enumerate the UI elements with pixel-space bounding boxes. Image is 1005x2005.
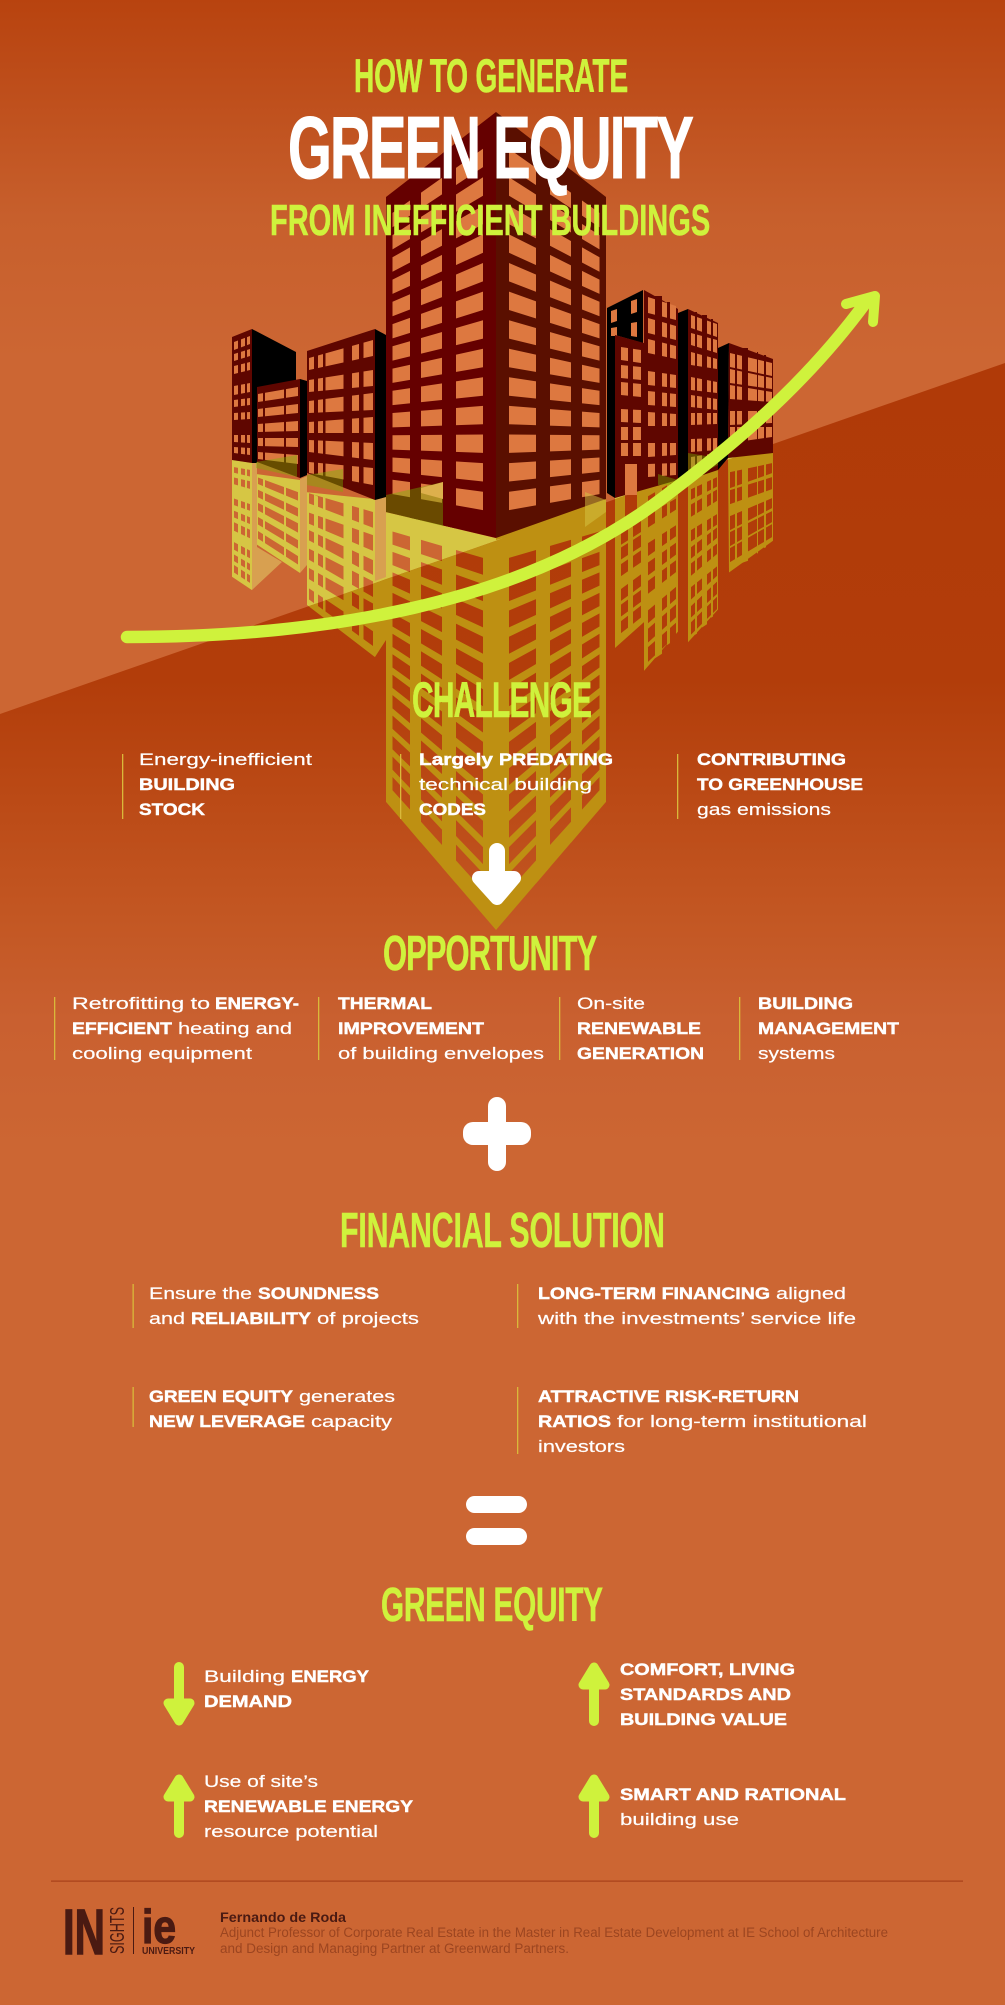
author name: Fernando de Roda bbox=[220, 1909, 346, 1925]
item: renewable generation: RENEWABLE bbox=[577, 1019, 701, 1038]
item: thermal improvement: of building envelopes bbox=[338, 1044, 544, 1063]
author bio: and Design and Managing Partner at Greenward Partners. bbox=[220, 1941, 569, 1956]
item: soundness and reliability: SOUNDNESS bbox=[258, 1284, 379, 1303]
item: comfort and building value bbox=[583, 1660, 795, 1729]
item: attractive risk-return: investors bbox=[538, 1437, 625, 1456]
item: attractive risk-return: for long-term institutional bbox=[617, 1412, 867, 1431]
item: green equity leverage: GREEN EQUITY bbox=[149, 1387, 294, 1406]
icon: up arrow bbox=[583, 1667, 605, 1721]
item: predating codes: CODES bbox=[419, 800, 486, 819]
panel: opportunity bbox=[54, 926, 900, 1063]
item: retrofitting: ENERGY- bbox=[215, 994, 299, 1013]
item: thermal improvement: THERMAL bbox=[338, 994, 432, 1013]
item: renewable energy potential: resource potential bbox=[204, 1822, 378, 1841]
heading: challenge: CHALLENGE bbox=[412, 672, 592, 728]
item: predating codes: Largely bbox=[419, 750, 494, 769]
panel: green equity bbox=[168, 1579, 846, 1841]
item: green equity leverage bbox=[132, 1387, 395, 1431]
heading: opportunity: OPPORTUNITY bbox=[383, 926, 597, 981]
item: long-term financing bbox=[517, 1284, 856, 1328]
item: green equity leverage: capacity bbox=[311, 1412, 393, 1431]
item: renewable generation bbox=[559, 994, 704, 1063]
heading: green equity: GREEN EQUITY bbox=[381, 1579, 603, 1632]
item: building management: MANAGEMENT bbox=[758, 1019, 900, 1038]
item: predating codes bbox=[400, 750, 613, 819]
item: attractive risk-return bbox=[517, 1387, 867, 1456]
title line 2: GREEN EQUITY bbox=[288, 98, 694, 197]
item: retrofitting: cooling equipment bbox=[72, 1044, 252, 1063]
item: long-term financing: with the investments’ service life bbox=[537, 1309, 856, 1328]
item: predating codes: technical building bbox=[419, 775, 592, 794]
item: greenhouse gas emissions: gas emissions bbox=[697, 800, 831, 819]
item: soundness and reliability: and bbox=[149, 1309, 185, 1328]
item: retrofitting bbox=[54, 994, 299, 1063]
growth arrow bbox=[127, 296, 875, 637]
logo: IN Sights, IE University: SIGHTS bbox=[107, 1907, 129, 1954]
item: building management bbox=[739, 994, 900, 1063]
footer bbox=[63, 1896, 888, 1968]
item: soundness and reliability: Ensure the bbox=[149, 1284, 252, 1303]
item: greenhouse gas emissions: CONTRIBUTING bbox=[697, 750, 846, 769]
panel: financial solution bbox=[132, 1203, 867, 1456]
item: soundness and reliability: of projects bbox=[317, 1309, 419, 1328]
item: renewable energy potential bbox=[168, 1772, 414, 1841]
item: predating codes: PREDATING bbox=[499, 750, 613, 769]
item: thermal improvement: IMPROVEMENT bbox=[338, 1019, 485, 1038]
item: smart and rational use bbox=[583, 1779, 846, 1833]
item: green equity leverage: NEW LEVERAGE bbox=[149, 1412, 305, 1431]
icon: down arrow bbox=[168, 1667, 190, 1721]
illustration: reflection of buildings bbox=[232, 453, 773, 930]
item: long-term financing: aligned bbox=[776, 1284, 846, 1303]
author bio: Adjunct Professor of Corporate Real Estate in the Master in Real Estate Development at IE School of Architecture bbox=[220, 1925, 888, 1940]
item: renewable generation: GENERATION bbox=[577, 1044, 704, 1063]
logo: IN Sights, IE University: ie bbox=[142, 1900, 176, 1953]
item: energy-inefficient building stock: BUILDING bbox=[139, 775, 235, 794]
item: greenhouse gas emissions bbox=[677, 750, 863, 819]
item: energy-inefficient building stock bbox=[122, 750, 312, 819]
icon: up arrow bbox=[583, 1779, 605, 1833]
item: attractive risk-return: ATTRACTIVE RISK-RETURN bbox=[538, 1387, 799, 1406]
item: soundness and reliability: RELIABILITY bbox=[191, 1309, 312, 1328]
title line 1: HOW TO GENERATE bbox=[354, 51, 628, 103]
title bbox=[270, 51, 710, 244]
logo: IN Sights, IE University: UNIVERSITY bbox=[142, 1946, 195, 1957]
icon: equals bbox=[466, 1496, 527, 1545]
item: energy demand: DEMAND bbox=[204, 1692, 292, 1711]
heading: financial solution: FINANCIAL SOLUTION bbox=[340, 1203, 665, 1258]
item: building management: systems bbox=[758, 1044, 835, 1063]
logo: IN Sights, IE University bbox=[63, 1896, 195, 1968]
item: smart and rational use: building use bbox=[620, 1810, 739, 1829]
item: energy demand: Building bbox=[204, 1667, 285, 1686]
panel: challenge bbox=[122, 672, 863, 819]
illustration: buildings bbox=[232, 112, 773, 590]
item: building management: BUILDING bbox=[758, 994, 853, 1013]
item: comfort and building value: BUILDING VALUE bbox=[620, 1710, 787, 1729]
item: retrofitting: EFFICIENT bbox=[72, 1019, 173, 1038]
item: renewable energy potential: Use of site’s bbox=[204, 1772, 318, 1791]
title line 3: FROM INEFFICIENT BUILDINGS bbox=[270, 195, 710, 244]
item: retrofitting: Retrofitting to bbox=[72, 994, 210, 1013]
item: renewable energy potential: RENEWABLE ENERGY bbox=[204, 1797, 414, 1816]
item: retrofitting: heating and bbox=[178, 1019, 292, 1038]
item: renewable generation: On-site bbox=[577, 994, 645, 1013]
item: comfort and building value: COMFORT, LIVING bbox=[620, 1660, 795, 1679]
author bio bbox=[220, 1925, 888, 1956]
icon: white down arrow bbox=[479, 851, 514, 898]
logo: IN Sights, IE University: IN bbox=[63, 1896, 105, 1968]
icon: up arrow bbox=[168, 1779, 190, 1833]
item: comfort and building value: STANDARDS AND bbox=[620, 1685, 791, 1704]
item: long-term financing: LONG-TERM FINANCING bbox=[538, 1284, 770, 1303]
item: energy demand bbox=[168, 1667, 370, 1721]
item: greenhouse gas emissions: TO GREENHOUSE bbox=[697, 775, 863, 794]
item: green equity leverage: generates bbox=[299, 1387, 395, 1406]
item: attractive risk-return: RATIOS bbox=[538, 1412, 611, 1431]
item: soundness and reliability bbox=[132, 1284, 419, 1328]
icon: plus bbox=[463, 1097, 531, 1171]
item: thermal improvement bbox=[318, 994, 544, 1063]
item: energy-inefficient building stock: Energy-inefficient bbox=[139, 750, 312, 769]
item: energy-inefficient building stock: STOCK bbox=[139, 800, 206, 819]
item: smart and rational use: SMART AND RATIONAL bbox=[620, 1785, 846, 1804]
item: energy demand: ENERGY bbox=[291, 1667, 370, 1686]
